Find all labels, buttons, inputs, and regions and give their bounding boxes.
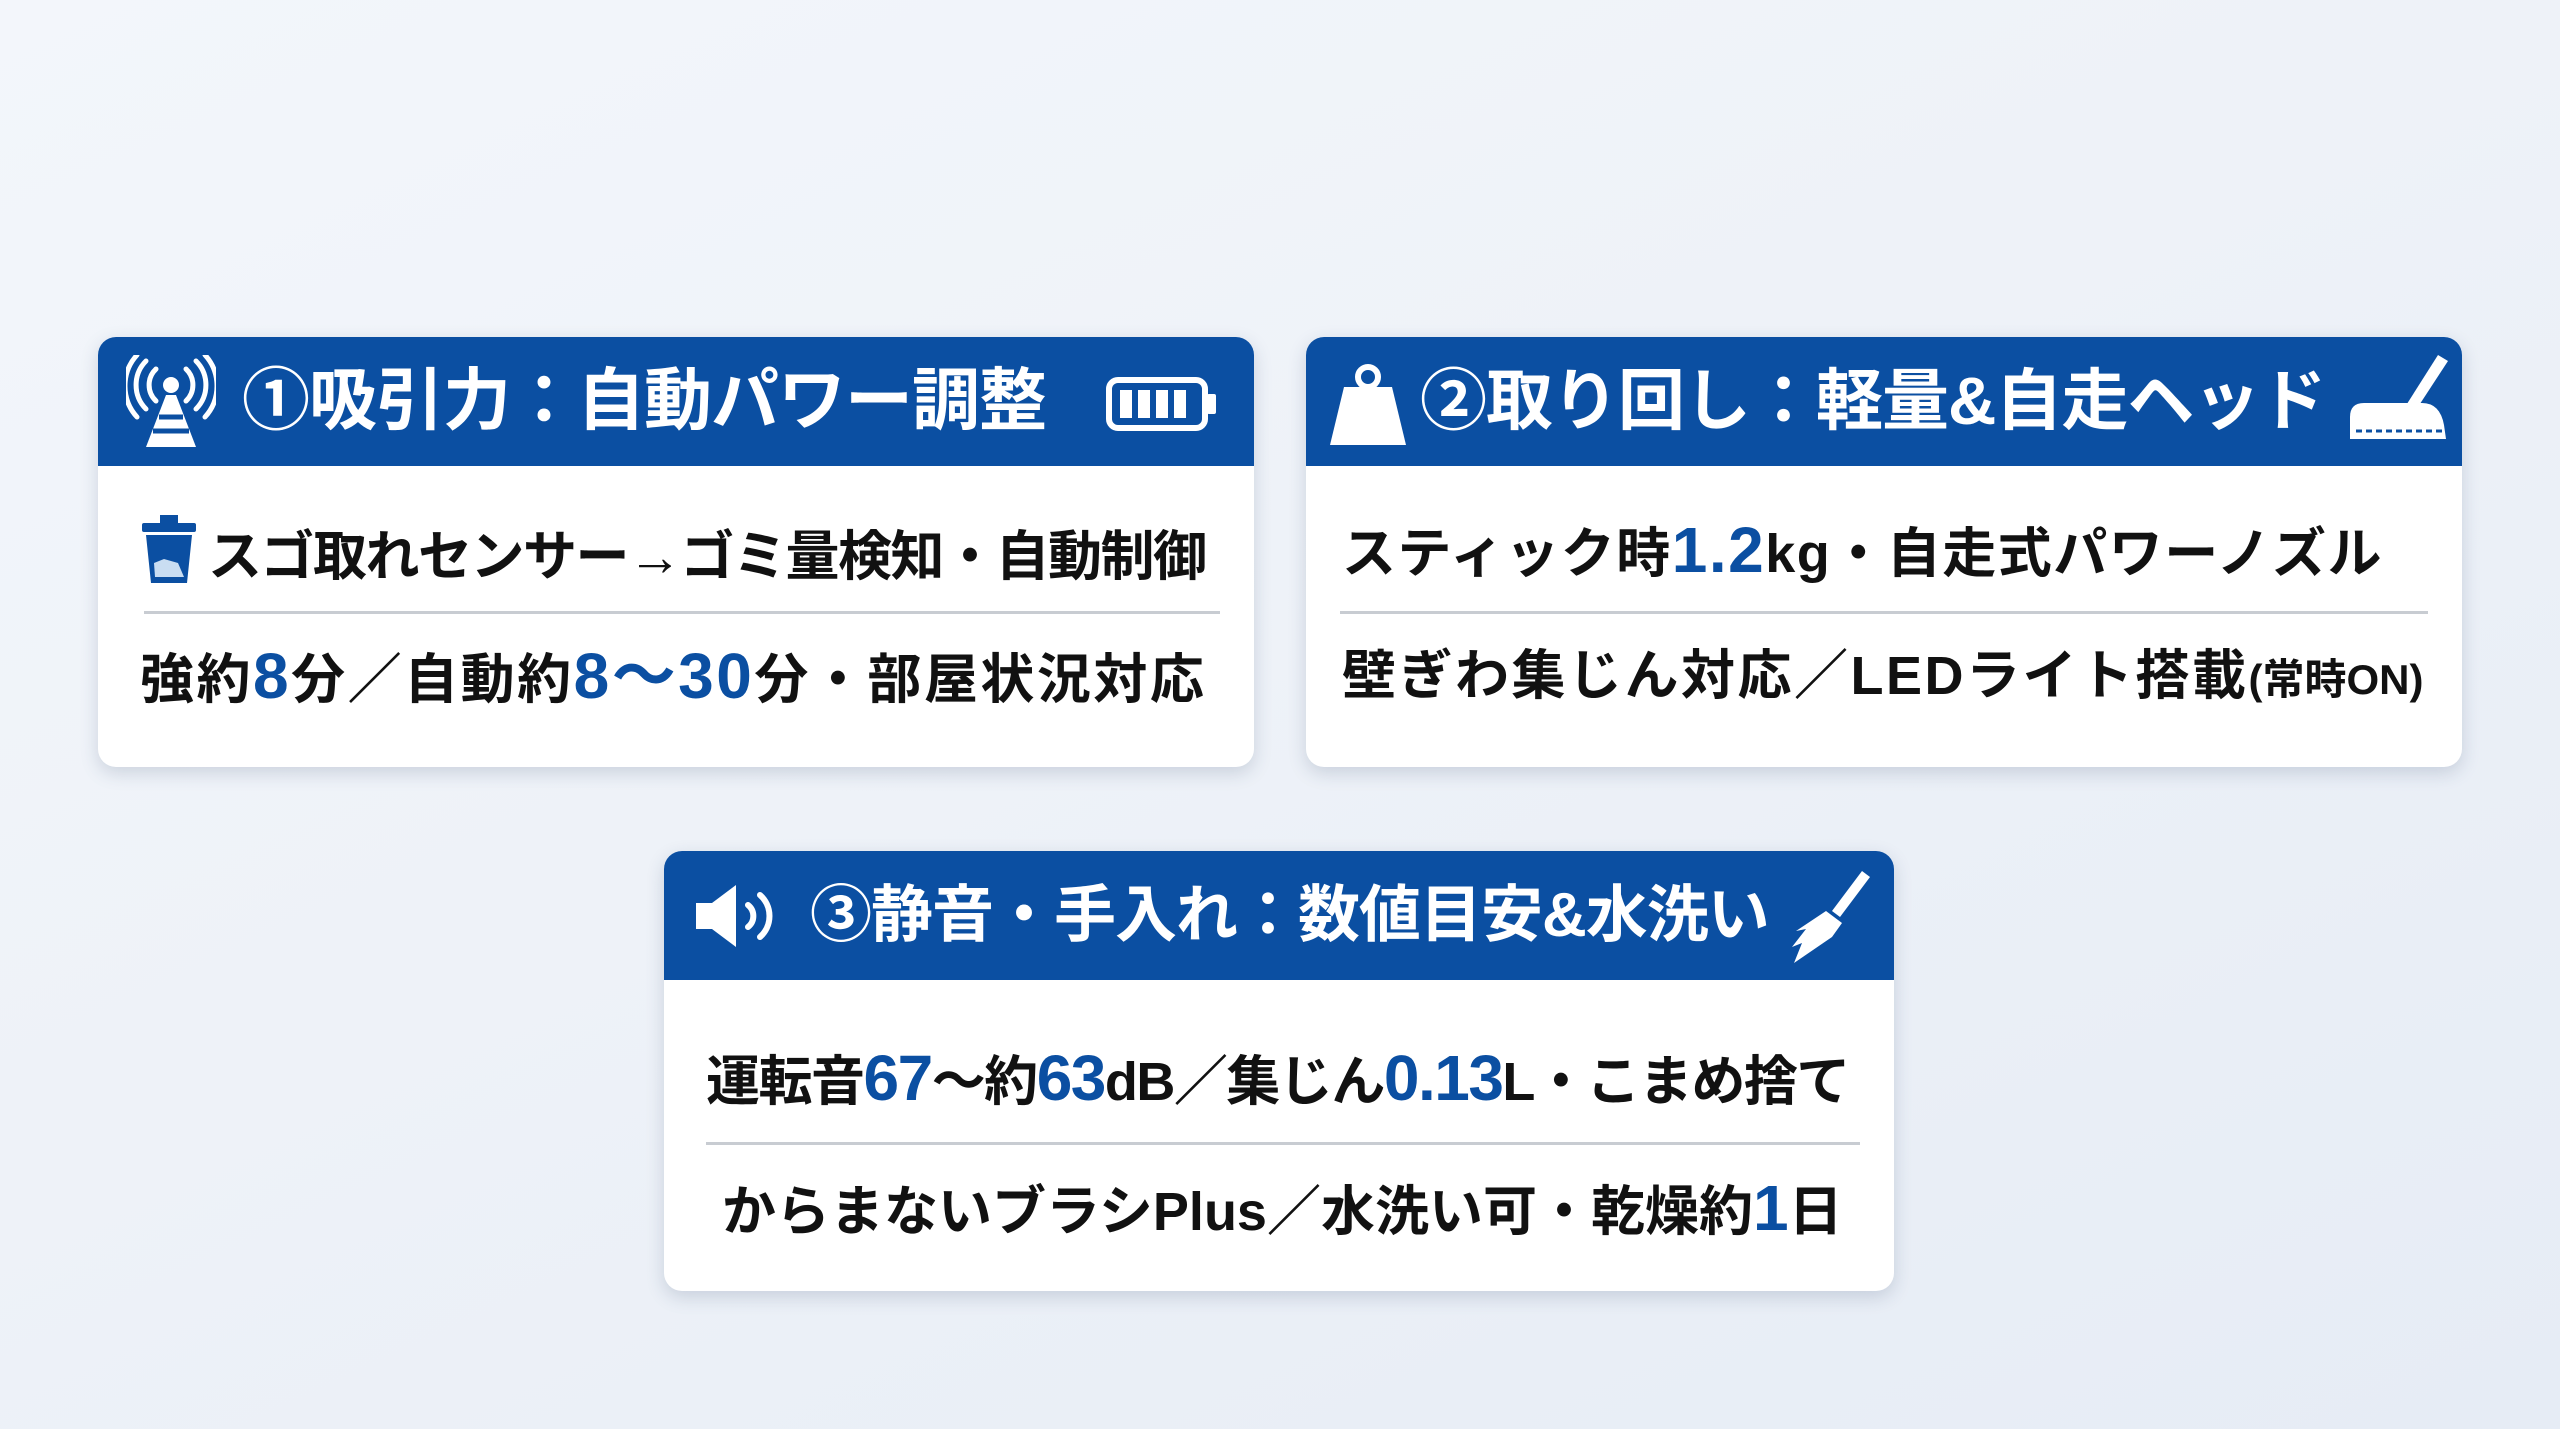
icon: battery	[1106, 377, 1216, 431]
row: runtime: 強約8分／自動約8〜30分・部屋状況対応	[140, 640, 1206, 712]
row: brush: からまないブラシPlus／水洗い可・乾燥約1日	[722, 1172, 1843, 1244]
icon: trash can	[142, 515, 196, 583]
icon: antenna	[126, 355, 216, 447]
header: suction	[98, 337, 1254, 466]
icon: speaker	[696, 885, 772, 947]
icon: vacuum head	[2350, 355, 2448, 439]
icon: weight	[1330, 364, 1406, 445]
row: LED: 壁ぎわ集じん対応／LEDライト搭載(常時ON)	[1342, 646, 2423, 706]
panel: suction power	[98, 337, 1254, 767]
heading 2: ②取り回し：軽量&自走ヘッド	[1420, 364, 2325, 439]
heading 1: ①吸引力：自動パワー調整	[242, 363, 1046, 439]
panel: noise & maintenance	[664, 851, 1894, 1291]
heading 3: ③静音・手入れ：数値目安&水洗い	[810, 881, 1769, 950]
row: weight: スティック時1.2kg・自走式パワーノズル	[1342, 514, 2383, 586]
panel: handling	[1306, 337, 2462, 767]
row: noise values: 運転音67〜約63dB／集じん0.13L・こまめ捨て	[706, 1042, 1849, 1114]
icon: brush	[1792, 871, 1870, 963]
header: handling	[1306, 337, 2462, 466]
row: sensor: スゴ取れセンサー→ゴミ量検知・自動制御	[208, 527, 1206, 587]
header: noise	[664, 851, 1894, 980]
